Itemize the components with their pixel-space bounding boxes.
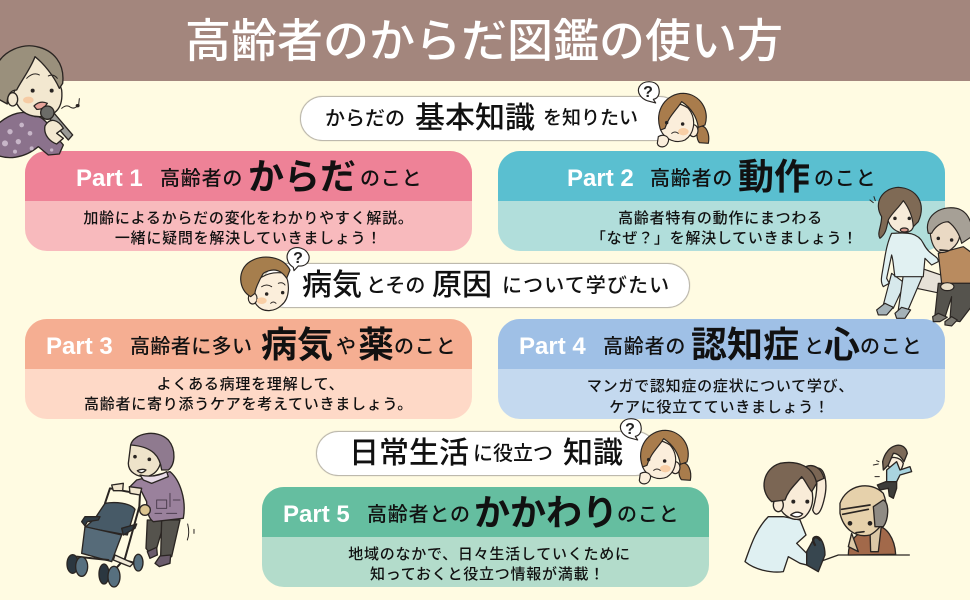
part 2 heading [498,151,945,201]
part 3 particle: や [336,336,357,358]
icon: grandma with walker [67,433,194,587]
pill: illness [262,263,690,308]
pill text 1: からだの [325,108,405,130]
panel: part 3 [25,319,472,419]
pill keyword: 知識 [563,437,623,470]
part 2 description [591,210,858,247]
part 4 keyword: 認知症 [691,324,799,365]
title: 高齢者のからだ図鑑の使い方 [185,15,783,67]
question mark: ? [293,250,303,267]
pill text: とその [366,275,425,297]
part 5 keyword: かかわり [474,492,618,533]
pill keyword: 病気 [302,269,362,302]
icon: grandma singing [0,46,79,158]
part 5 lead: 高齢者との [367,504,471,526]
part 4 line 2: ケアに役立てていきましょう！ [609,399,830,416]
part 1 description [83,210,414,247]
title banner [0,0,970,81]
part 3 description [84,376,413,413]
part 2 keyword: 動作 [738,156,810,197]
part 3 keyword: 病気 [261,324,333,365]
part 2 tail: のこと [814,168,876,190]
icon: woman thinking [638,82,709,147]
part 4 keyword 2: 心 [824,324,860,365]
panel: part 1 [25,151,472,251]
question mark: ? [643,84,653,101]
part 5 heading [262,487,709,537]
pill keyword 1: 基本知識 [415,102,535,135]
pill: daily life [316,431,658,476]
panel: part 5 [262,487,709,587]
part 1 tail: のこと [360,168,422,190]
panel: part 2 [498,151,945,251]
pill keyword: 日常生活 [349,437,469,470]
pill keyword: 原因 [432,269,492,302]
part 4 description [587,378,854,416]
part 3 line 1: よくある病理を理解して、 [157,376,344,393]
part 3 lead: 高齢者に多い [130,336,252,358]
part 5 description [348,546,631,583]
part 3 tail: のこと [394,336,456,358]
part 5 line 2: 知っておくと役立つ情報が満載！ [370,566,605,583]
part 2 lead: 高齢者の [650,168,733,190]
part 1 heading [25,151,472,201]
pill text 2: を知りたい [543,108,638,129]
part 2 label: Part 2 [567,165,634,192]
part 3 keyword 2: 薬 [358,324,394,365]
icon: woman thinking: ? [625,421,635,438]
part 4 lead: 高齢者の [603,336,686,358]
pill text: について学びたい [502,275,670,297]
part 1 label: Part 1 [76,165,143,192]
part 4 tail: のこと [860,336,922,358]
part 2 line 2: 「なぜ？」を解決していきましょう！ [591,230,858,247]
part 3 heading [25,319,472,369]
part 5 tail: のこと [617,504,679,526]
part 1 lead: 高齢者の [160,168,243,190]
part 4 heading [498,319,945,369]
part 2 line 1: 高齢者特有の動作にまつわる [618,210,823,227]
icon: caregiver helping elderly man [745,445,912,572]
icon: woman thinking [620,419,691,484]
part 4 line 1: マンガで認知症の症状について学び、 [587,378,854,395]
part 5 line 1: 地域のなかで、日々生活していくために [348,546,631,563]
panel: part 4 [498,319,945,419]
part 1 line 1: 加齢によるからだの変化をわかりやすく解説。 [83,210,414,227]
part 3 line 2: 高齢者に寄り添うケアを考えていきましょう。 [84,396,413,413]
icon: nurse and elderly person on bench [870,187,970,326]
pill text: に役立つ [473,443,553,465]
part 1 keyword: からだ [248,156,356,197]
part 4 particle: と [804,336,825,358]
pill: basic knowledge [300,96,682,141]
icon: man with question [241,248,309,311]
part 4 label: Part 4 [519,333,586,360]
part 1 line 2: 一緒に疑問を解決していきましょう！ [115,230,382,247]
part 3 label: Part 3 [46,333,113,360]
part 5 label: Part 5 [283,501,350,528]
